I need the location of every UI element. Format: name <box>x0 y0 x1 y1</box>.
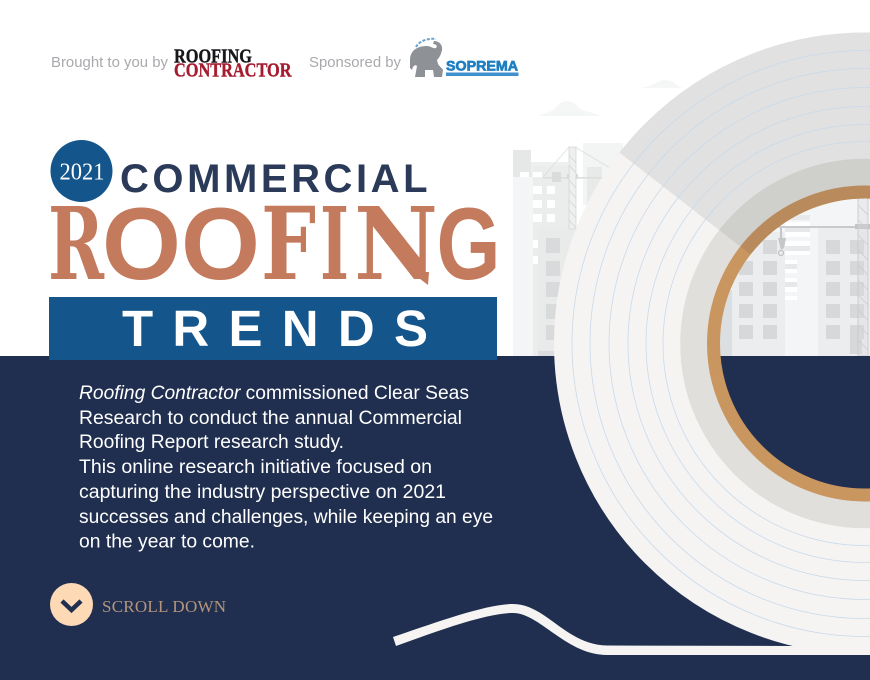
badge: 2021: 2021 <box>60 160 104 186</box>
scroll down cue <box>50 583 226 626</box>
heading: ROOFING: I <box>320 185 349 303</box>
logo: Roofing Contractor: ROOFING <box>174 47 252 68</box>
background: clouds <box>539 80 683 116</box>
heading: ROOFING: F <box>261 185 316 303</box>
intro paragraph <box>79 383 493 552</box>
intro paragraph: on the year to come. <box>79 532 255 552</box>
heading: ROOFING <box>48 185 500 303</box>
intro paragraph: This online research initiative focused on <box>79 457 432 478</box>
logo: Roofing Contractor <box>174 47 292 82</box>
roll: inner grey band <box>694 172 870 515</box>
heading: ROOFING: G <box>436 187 500 301</box>
sponsor line: sponsored by: Sponsored by <box>309 55 402 71</box>
logo: Roofing Contractor: CONTRACTOR <box>174 61 292 82</box>
heading: ROOFING: N <box>354 185 438 303</box>
illustration: loose membrane strip <box>393 604 870 655</box>
icon: chevron button <box>50 583 93 626</box>
logo: Soprema <box>410 39 518 77</box>
roll: light wound layers <box>617 96 870 591</box>
intro paragraph: successes and challenges, while keeping an eye <box>79 507 493 528</box>
roll: copper core <box>714 192 870 495</box>
roll: shaded upper sector <box>620 32 870 254</box>
heading: COMMERCIAL: COMMERCIAL <box>120 157 428 201</box>
intro paragraph: Roofing Contractor commissioned Clear Seas <box>79 383 469 404</box>
sponsor line: brought to you by: Brought to you by <box>51 55 169 71</box>
background: skyline seen through the roll core <box>720 198 870 356</box>
heading: ROOFING: R <box>48 185 105 303</box>
badge: 2021 <box>50 140 112 202</box>
logo: Soprema: SOPREMA <box>446 58 518 74</box>
scroll down cue: SCROLL DOWN <box>102 597 226 616</box>
navy background panel <box>0 356 870 680</box>
roll: blue layer lines <box>572 50 870 636</box>
intro paragraph: capturing the industry perspective on 2021 <box>79 482 446 503</box>
heading: ROOFING: O <box>181 187 260 301</box>
intro paragraph: Research to conduct the annual Commercial <box>79 408 462 429</box>
icon: elephant <box>410 41 443 77</box>
banner: TRENDS <box>49 297 497 360</box>
intro paragraph: Roofing Report research study. <box>79 432 344 453</box>
heading: ROOFING: O <box>102 187 181 301</box>
illustration: membrane roll <box>572 50 870 636</box>
banner: TRENDS: TRENDS <box>122 300 428 357</box>
background: left construction skyline <box>513 143 623 356</box>
